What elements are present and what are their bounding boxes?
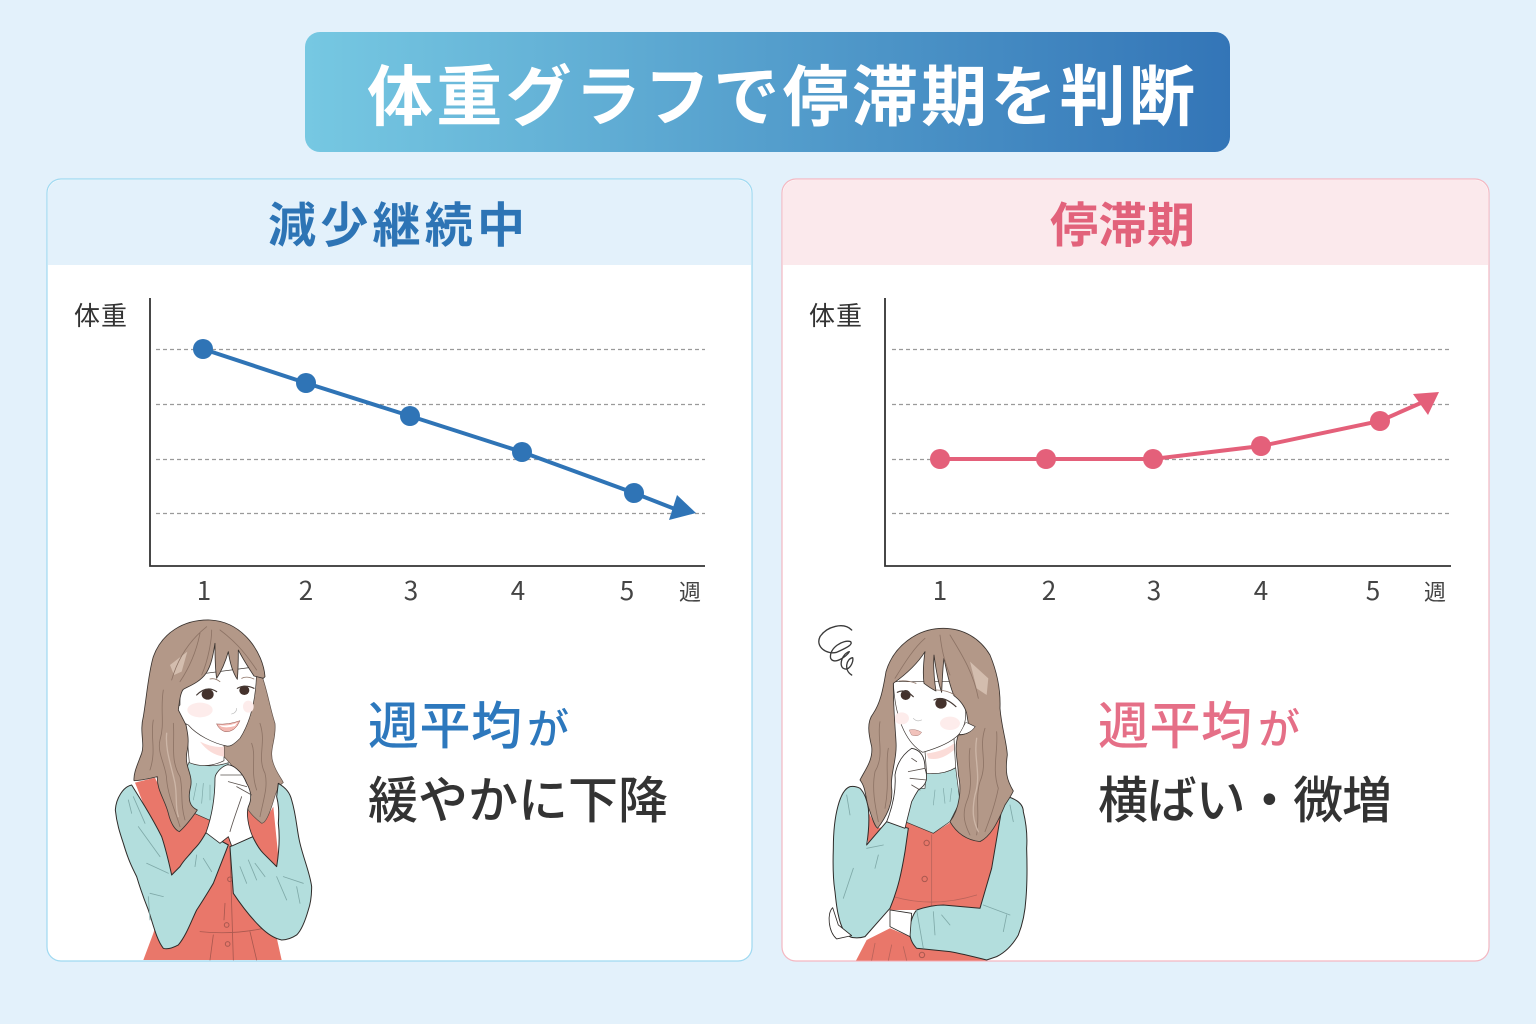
dress	[135, 778, 282, 960]
text: weekly average flat or slightly increasing: が	[1258, 706, 1300, 753]
line chart: plateau weight: 3	[1147, 571, 1161, 608]
text: weekly average flat or slightly increasing: 横ばい・微増	[1098, 773, 1392, 829]
line chart: decreasing weight: 2	[299, 571, 313, 608]
line chart: decreasing weight: 4	[511, 571, 525, 608]
text: weekly average declines gently: 緩やかに下降	[368, 773, 668, 829]
panel heading: plateau: 停滞期	[1050, 200, 1195, 253]
turtleneck	[897, 768, 960, 833]
panel: plateau	[782, 179, 1489, 961]
line chart: decreasing weight: 5	[620, 571, 634, 608]
line chart: plateau weight: 2	[1042, 571, 1056, 608]
face details	[202, 689, 214, 700]
line chart: decreasing weight	[74, 298, 705, 608]
line chart: plateau weight: 体重	[809, 301, 862, 331]
panel: weight still decreasing	[47, 179, 752, 961]
front hair	[134, 620, 265, 832]
title	[305, 32, 1230, 152]
panel heading: plateau	[783, 180, 1488, 265]
line chart: decreasing weight: 1	[197, 571, 211, 608]
text: weekly average declines gently: が	[527, 706, 569, 753]
line chart: plateau weight: 1	[933, 571, 947, 608]
hair	[860, 628, 1013, 842]
line chart: plateau weight: 4	[1254, 571, 1268, 608]
line chart: plateau weight	[809, 298, 1452, 608]
icon: confused scribble	[819, 626, 853, 675]
text: weekly average declines gently	[368, 698, 668, 829]
panel heading: decreasing: 減少継続中	[268, 200, 525, 253]
line chart: decreasing weight: 週	[679, 580, 701, 605]
back hair	[224, 660, 283, 823]
illustration: worried woman with hand on chin	[819, 626, 1027, 961]
line chart: decreasing weight: 体重	[74, 301, 127, 331]
sleeves	[115, 785, 228, 949]
ear and face details	[959, 722, 975, 734]
text: weekly average flat or slightly increasing: 週平均	[1098, 698, 1252, 755]
line chart: decreasing weight: 3	[404, 571, 418, 608]
panel heading: decreasing	[48, 180, 751, 265]
text: weekly average flat or slightly increasing	[1098, 698, 1392, 829]
neck and face	[186, 723, 224, 766]
illustration: smiling woman with clasped hands	[115, 620, 312, 960]
hands	[887, 748, 927, 828]
text: weekly average declines gently: 週平均	[368, 698, 522, 755]
title: 体重グラフで停滞期を判断	[367, 60, 1195, 134]
hands	[206, 765, 253, 846]
dress	[867, 787, 1004, 910]
sleeves	[833, 786, 908, 938]
line chart: plateau weight: 週	[1424, 580, 1446, 605]
line chart: plateau weight: 5	[1366, 571, 1380, 608]
turtleneck	[180, 762, 228, 823]
neck and face	[925, 738, 956, 774]
